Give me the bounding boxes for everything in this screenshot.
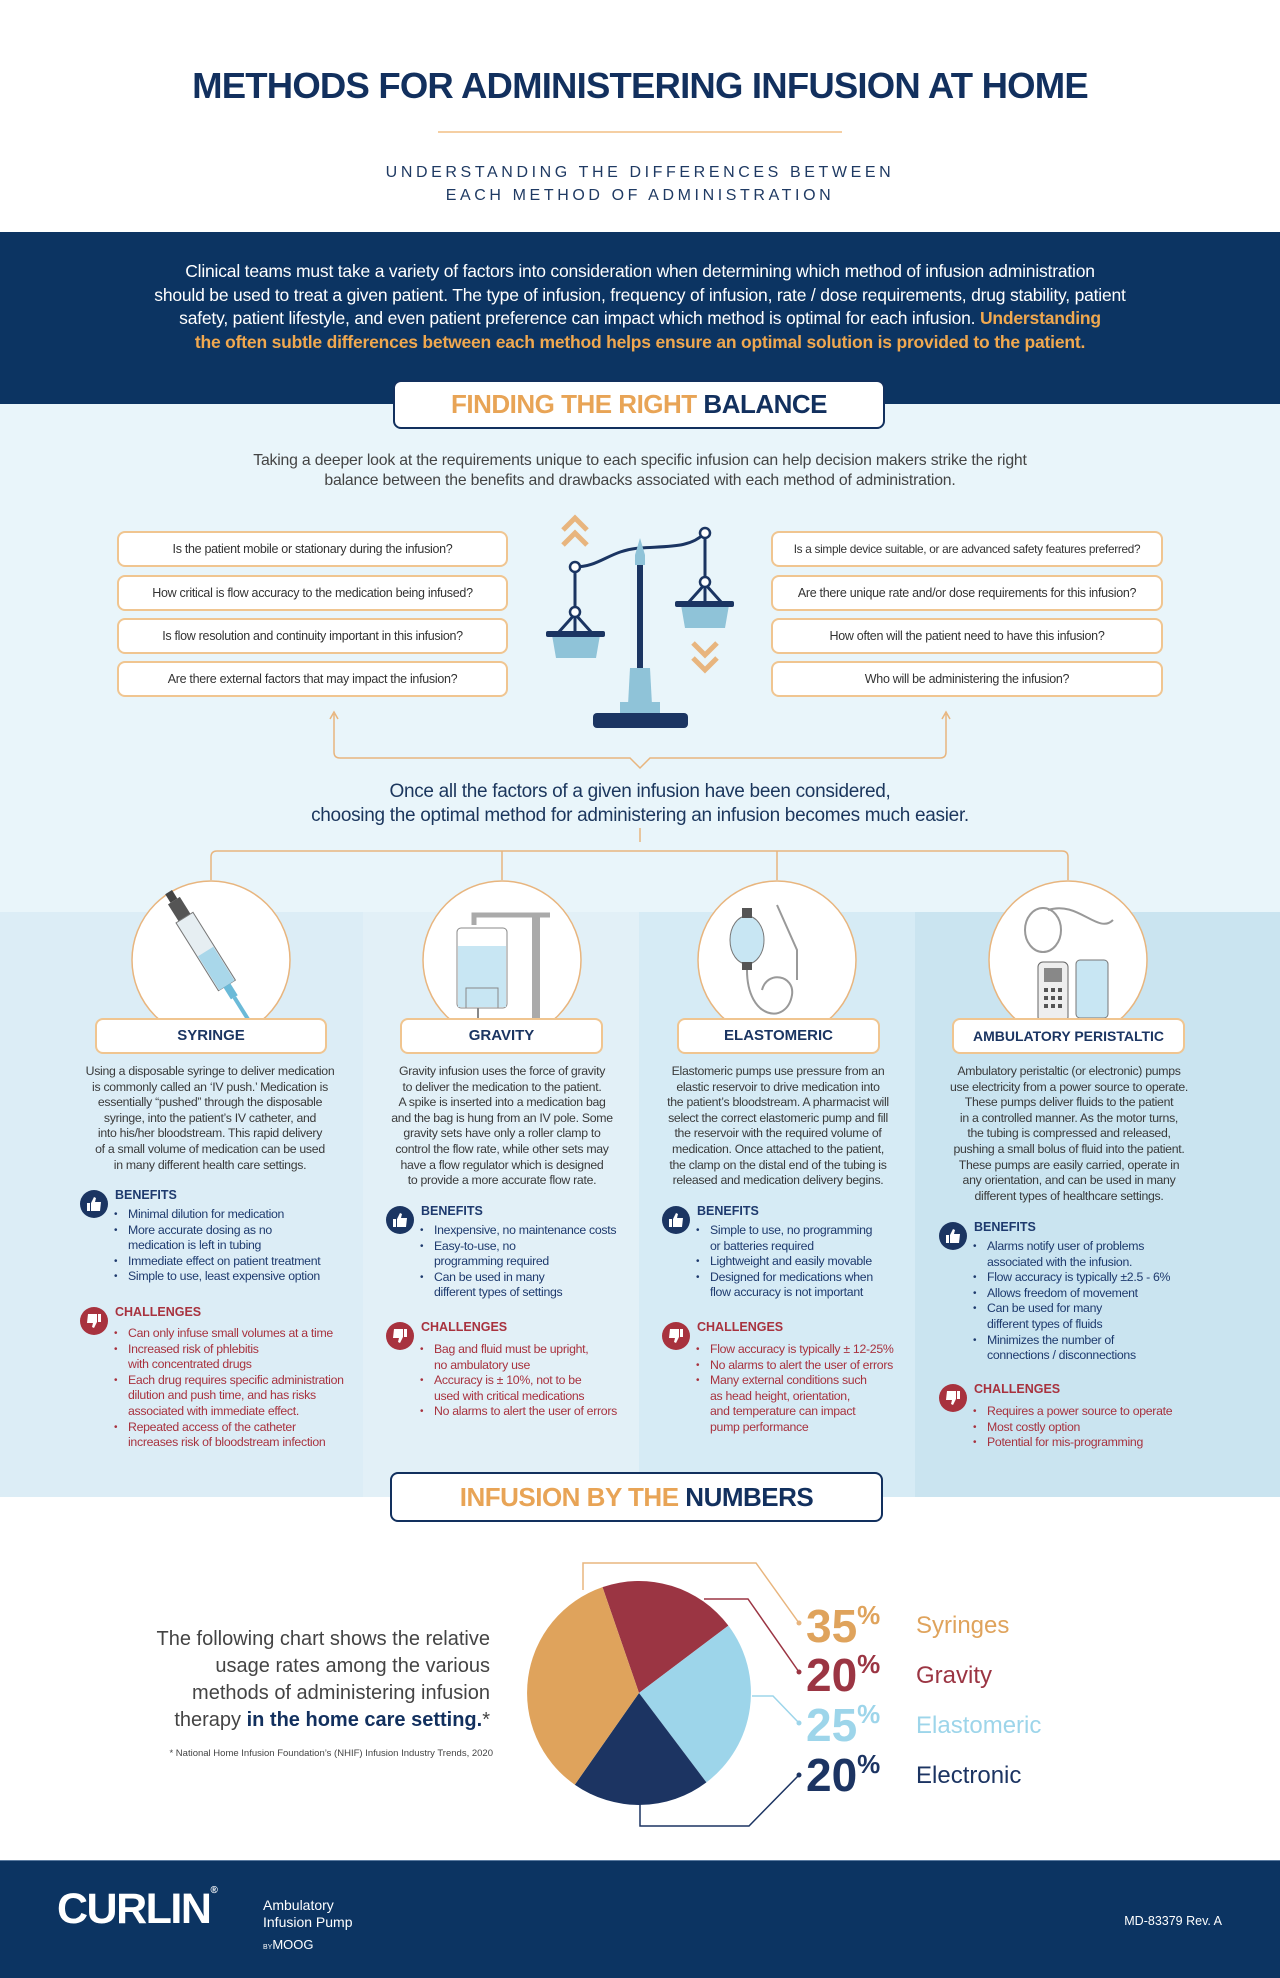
logo: curlin: CURLIN® (57, 1885, 216, 1933)
balance intro text: balance between the benefits and drawbacks associated with each method of administration. (324, 472, 956, 489)
panel: syringe: increases risk of bloodstream infection (128, 1435, 325, 1449)
icon: IV bag (422, 880, 582, 1018)
panel: gravity: No alarms to alert the user of errors (434, 1404, 617, 1418)
pie chart: % (857, 1699, 880, 1729)
description: in many different health care settings. (114, 1158, 306, 1172)
panel: ambulatory peristaltic: Flow accuracy is typically ±2.5 - 6% (987, 1270, 1170, 1284)
panel: ambulatory peristaltic: connections / disconnections (987, 1348, 1136, 1362)
description: is commonly called an ‘IV push.’ Medication is (92, 1080, 328, 1094)
pie chart: % (857, 1749, 880, 1779)
right questions: Are there unique rate and/or dose requirements for this infusion? (798, 586, 1136, 600)
icon: thumbs down (939, 1384, 967, 1412)
panel: gravity: used with critical medications (434, 1389, 584, 1403)
slice: electronic (575, 1693, 706, 1805)
panel: syringe: associated with immediate effect. (128, 1404, 299, 1418)
icon: thumbs up (662, 1206, 690, 1234)
panel: ambulatory peristaltic: BENEFITS (974, 1220, 1036, 1234)
pie chart: Elastomeric (916, 1712, 1041, 1739)
bracket connector (329, 710, 951, 769)
panel: syringe: Each drug requires specific administration (128, 1373, 344, 1387)
footer: Ambulatory (263, 1897, 334, 1913)
panel: ambulatory peristaltic: These pumps deliver fluids to the patient (965, 1095, 1173, 1109)
chart description text (156, 1628, 490, 1731)
panel: elastomeric (662, 880, 894, 1434)
pie chart: 20 (806, 1749, 857, 1801)
intro text: should be used to treat a given patient. The type of infusion, frequency of infusion, rate / dose requirements, drug stability, patient (154, 284, 1126, 304)
panel: gravity: control the flow rate, while other sets may (395, 1142, 609, 1156)
panel: gravity: Inexpensive, no maintenance costs (434, 1223, 616, 1237)
panel: elastomeric: No alarms to alert the user of errors (710, 1358, 893, 1372)
panel: syringe (80, 880, 344, 1449)
panel: gravity: to provide a more accurate flow rate. (408, 1173, 596, 1187)
panel: elastomeric: Simple to use, no programming (710, 1223, 872, 1237)
panel: ambulatory peristaltic: These pumps are easily carried, operate in (959, 1158, 1179, 1172)
description: into his/her bloodstream. This rapid delivery (98, 1126, 322, 1140)
tree connector (210, 828, 1069, 880)
icon: syringe (131, 880, 291, 1018)
subtitle: EACH METHOD OF ADMINISTRATION (446, 187, 834, 204)
panel: ambulatory peristaltic: Allows freedom of movement (987, 1286, 1138, 1300)
icon: thumbs down (386, 1322, 414, 1350)
icon: elastomeric pump (697, 880, 857, 1018)
left questions: Are there external factors that may impact the infusion? (168, 672, 457, 686)
panel: gravity (386, 880, 617, 1418)
panel: gravity: Easy-to-use, no (434, 1239, 516, 1253)
panel: ambulatory peristaltic: Alarms notify user of problems (987, 1239, 1144, 1253)
panel: syringe: Simple to use, least expensive option (128, 1269, 320, 1283)
panel: elastomeric: flow accuracy is not important (710, 1285, 863, 1299)
description (86, 1064, 334, 1172)
conclusion text (311, 781, 969, 826)
panel: elastomeric: BENEFITS (697, 1204, 759, 1218)
heading: finding the right balance (393, 380, 885, 429)
panel: syringe: dilution and push time, and has risks (128, 1388, 316, 1402)
panel: gravity: gravity sets have only a roller clamp to (403, 1126, 601, 1140)
panel: syringe: Can only infuse small volumes at a time (128, 1326, 333, 1340)
panel: gravity: Bag and fluid must be upright, (434, 1342, 588, 1356)
panel: ambulatory peristaltic: different types of healthcare settings. (974, 1189, 1164, 1203)
panel: ambulatory peristaltic: Ambulatory peristaltic (or electronic) pumps (957, 1064, 1181, 1078)
description: Using a disposable syringe to deliver medication (86, 1064, 334, 1078)
icon: thumbs down (662, 1322, 690, 1350)
description: syringe, into the patient’s IV catheter, and (104, 1111, 316, 1125)
panel: ambulatory peristaltic: Requires a power source to operate (987, 1404, 1172, 1418)
panel: ambulatory peristaltic: Can be used for many (987, 1301, 1102, 1315)
label: ambulatory peristaltic: AMBULATORY PERISTALTIC (973, 1028, 1164, 1044)
panel: syringe: with concentrated drugs (128, 1357, 252, 1371)
label: elastomeric (677, 1018, 880, 1054)
panel: ambulatory peristaltic: pushing a small bolus of fluid into the patient. (953, 1142, 1184, 1156)
description: essentially “pushed” through the disposable (98, 1095, 322, 1109)
slice: gravity (602, 1581, 728, 1693)
left questions: Is the patient mobile or stationary during the infusion? (173, 542, 452, 556)
balance intro text: Taking a deeper look at the requirements unique to each specific infusion can help decision makers strike the right (253, 452, 1027, 469)
intro navy band (0, 232, 1280, 404)
pie chart: Gravity (916, 1662, 992, 1689)
left questions: Is flow resolution and continuity important in this infusion? (162, 629, 463, 643)
panel: elastomeric: elastic reservoir to drive medication into (676, 1080, 880, 1094)
pie chart: 20 (806, 1649, 857, 1701)
panel: elastomeric: pump performance (710, 1420, 808, 1434)
panel: elastomeric: CHALLENGES (697, 1320, 783, 1334)
panel: gravity: to deliver the medication to the patient. (403, 1080, 601, 1094)
column backgrounds (0, 912, 363, 1497)
label: syringe (95, 1018, 327, 1054)
description: of a small volume of medication can be used (95, 1142, 325, 1156)
pie chart: 25 (806, 1699, 857, 1751)
panel: ambulatory peristaltic: use electricity from a power source to operate. (950, 1080, 1188, 1094)
icon: thumbs up (386, 1206, 414, 1234)
panel: ambulatory peristaltic: associated with the infusion. (987, 1255, 1132, 1269)
pie chart (527, 1562, 1041, 1827)
panel: gravity: no ambulatory use (434, 1358, 530, 1372)
panel: syringe: Repeated access of the catheter (128, 1420, 296, 1434)
label: gravity (400, 1018, 603, 1054)
icon: thumbs up (80, 1190, 108, 1218)
panel: ambulatory peristaltic: the tubing is compressed and released, (967, 1126, 1171, 1140)
panel: syringe: BENEFITS (115, 1188, 177, 1202)
icon: balance scale (546, 514, 734, 728)
panel: elastomeric: the patient’s bloodstream. A pharmacist will (667, 1095, 889, 1109)
footer (0, 1860, 1280, 1978)
slice: elastomeric (639, 1626, 751, 1782)
pie chart: 35 (806, 1600, 857, 1652)
pie chart: Electronic (916, 1762, 1021, 1789)
panel: elastomeric: Many external conditions such (710, 1373, 867, 1387)
panel: gravity: CHALLENGES (421, 1320, 507, 1334)
subtitle (386, 164, 894, 204)
panel: gravity: have a flow regulator which is designed (401, 1158, 603, 1172)
panel: ambulatory peristaltic: in a controlled manner. As the motor turns, (960, 1111, 1178, 1125)
panel: elastomeric: as head height, orientation, (710, 1389, 850, 1403)
pie chart: Syringes (916, 1612, 1009, 1639)
panel: ambulatory peristaltic: Potential for mis-programming (987, 1435, 1143, 1449)
right questions: How often will the patient need to have this infusion? (830, 629, 1104, 643)
panel: gravity: and the bag is hung from an IV pole. Some (391, 1111, 613, 1125)
panel: ambulatory peristaltic: different types of fluids (987, 1317, 1102, 1331)
chart description text: therapy in the home care setting.* (174, 1709, 490, 1731)
footer: BYMOOG (263, 1937, 314, 1952)
label: ambulatory peristaltic (952, 1018, 1185, 1054)
panel: gravity: A spike is inserted into a medication bag (398, 1095, 606, 1109)
panel: gravity: Can be used in many (434, 1270, 545, 1284)
document id: MD-83379 Rev. A (1124, 1914, 1222, 1928)
icon: thumbs down (80, 1307, 108, 1335)
panel: gravity: Gravity infusion uses the force of gravity (399, 1064, 605, 1078)
intro text: safety, patient lifestyle, and even patient preference can impact which method is optimal for each infusion. Understanding (179, 308, 1101, 328)
panel: elastomeric: Lightweight and easily movable (710, 1254, 872, 1268)
subtitle: UNDERSTANDING THE DIFFERENCES BETWEEN (386, 164, 894, 181)
panel: gravity: different types of settings (434, 1285, 562, 1299)
right questions: Is a simple device suitable, or are advanced safety features preferred? (794, 542, 1140, 556)
chart description text: usage rates among the various (215, 1655, 490, 1677)
panel: ambulatory peristaltic (939, 880, 1188, 1449)
slice: syringes (527, 1587, 639, 1785)
panel: elastomeric: select the correct elastomeric pump and fill (668, 1111, 888, 1125)
left questions: How critical is flow accuracy to the medication being infused? (152, 586, 473, 600)
panel: ambulatory peristaltic: Minimizes the number of (987, 1333, 1114, 1347)
balance section background (0, 404, 1280, 912)
conclusion text: choosing the optimal method for administering an infusion becomes much easier. (311, 805, 969, 826)
label: gravity: GRAVITY (469, 1027, 534, 1044)
heading: finding the right balance: FINDING THE RIGHT BALANCE (451, 389, 827, 419)
panel: elastomeric: the clamp on the distal end of the tubing is (669, 1158, 887, 1172)
left questions (117, 531, 508, 697)
label: syringe: SYRINGE (177, 1027, 245, 1044)
panel: elastomeric: Elastomeric pumps use pressure from an (672, 1064, 884, 1078)
pie chart: % (857, 1649, 880, 1679)
chart description text: methods of administering infusion (192, 1682, 490, 1704)
icon: thumbs up (939, 1222, 967, 1250)
intro text: the often subtle differences between each method helps ensure an optimal solution is provided to the patient. (195, 332, 1085, 352)
panel: ambulatory peristaltic: any orientation, and can be used in many (963, 1173, 1175, 1187)
title: METHODS FOR ADMINISTERING INFUSION AT HOME (192, 65, 1088, 106)
panel: syringe: Minimal dilution for medication (128, 1207, 284, 1221)
footer: Infusion Pump (263, 1914, 352, 1930)
panel: gravity: Accuracy is ± 10%, not to be (434, 1373, 581, 1387)
panel: gravity: BENEFITS (421, 1204, 483, 1218)
heading: infusion by the numbers (390, 1472, 883, 1522)
right questions: Who will be administering the infusion? (865, 672, 1069, 686)
conclusion text: Once all the factors of a given infusion have been considered, (389, 781, 891, 802)
panel: elastomeric: released and medication delivery begins. (673, 1173, 883, 1187)
right questions (771, 531, 1163, 697)
panel: elastomeric: and temperature can impact (710, 1404, 855, 1418)
footnote: * National Home Infusion Foundation’s (NHIF) Infusion Industry Trends, 2020 (169, 1748, 493, 1759)
panel: syringe: CHALLENGES (115, 1305, 201, 1319)
panel: syringe: Increased risk of phlebitis (128, 1342, 259, 1356)
panel: ambulatory peristaltic: CHALLENGES (974, 1382, 1060, 1396)
label: elastomeric: ELASTOMERIC (724, 1027, 833, 1044)
panel: gravity: programming required (434, 1254, 549, 1268)
panel: elastomeric: Flow accuracy is typically ± 12-25% (710, 1342, 894, 1356)
chart description text: The following chart shows the relative (156, 1628, 490, 1650)
panel: syringe: More accurate dosing as no (128, 1223, 272, 1237)
panel: syringe: medication is left in tubing (128, 1238, 261, 1252)
heading: infusion by the numbers: INFUSION BY THE NUMBERS (460, 1482, 813, 1512)
panel: elastomeric: the reservoir with the required volume of (674, 1126, 882, 1140)
pie chart: % (857, 1600, 880, 1630)
panel: elastomeric: or batteries required (710, 1239, 814, 1253)
balance intro text (253, 452, 1027, 489)
panel: elastomeric: medication. Once attached to the patient, (672, 1142, 884, 1156)
panel: syringe: Immediate effect on patient treatment (128, 1254, 320, 1268)
panel: elastomeric: Designed for medications when (710, 1270, 873, 1284)
intro text: Clinical teams must take a variety of factors into consideration when determining which method of infusion administration (185, 261, 1095, 281)
icon: electronic pump (988, 880, 1148, 1018)
panel: ambulatory peristaltic: Most costly option (987, 1420, 1080, 1434)
intro text (154, 261, 1126, 352)
